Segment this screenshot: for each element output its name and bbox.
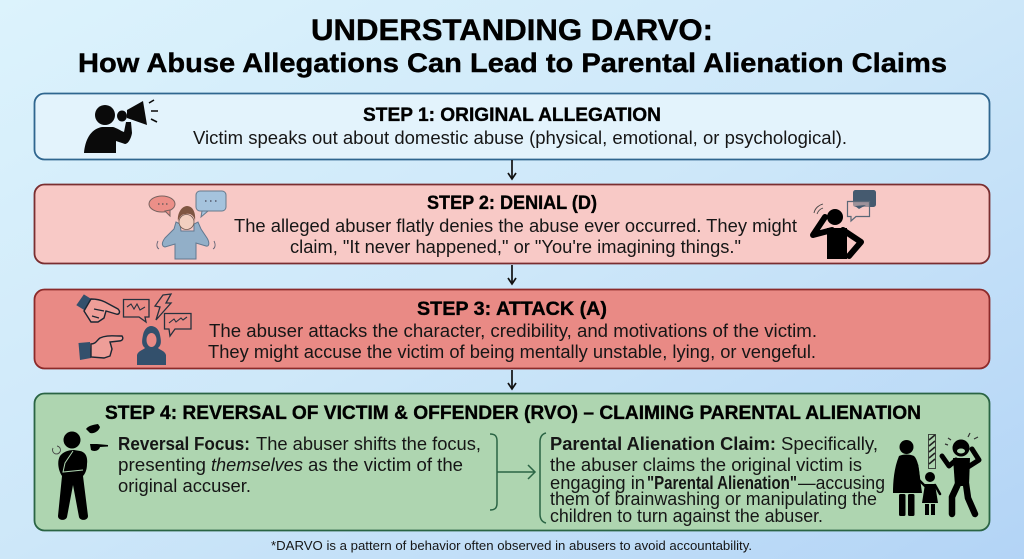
connector: bracket and arrow (490, 433, 546, 523)
parental alienation claim text: children to turn against the abuser. (550, 506, 823, 526)
step 4 heading: STEP 4: REVERSAL OF VICTIM & OFFENDER (RVO) – CLAIMING PARENTAL ALIENATION (105, 402, 921, 424)
reversal focus text: The abuser shifts the focus, (256, 433, 481, 454)
parental alienation claim text: Parental Alienation Claim: (550, 433, 776, 454)
icon: frustrated person with dark speech bubbles (813, 190, 876, 259)
title (78, 14, 947, 78)
panel: step 3 attack (34, 290, 990, 368)
step 3 text: They might accuse the victim of being mentally unstable, lying, or vengeful. (208, 341, 816, 362)
parental alienation claim text (550, 433, 885, 526)
icon: mother and child with distressed man (893, 433, 979, 516)
footnote: *DARVO is a pattern of behavior often observed in abusers to avoid accountability. (271, 538, 752, 553)
parental alienation claim text: Specifically, (781, 433, 878, 454)
parental alienation claim text: engaging in (550, 473, 645, 493)
icon: person with megaphone (84, 100, 158, 153)
step 1 heading: STEP 1: ORIGINAL ALLEGATION (363, 104, 661, 126)
icon: person covering ears with speech bubbles (149, 191, 226, 259)
reversal focus text: themselves (211, 454, 303, 475)
arrow: step 3 to 4 (511, 370, 513, 389)
title: UNDERSTANDING DARVO: (311, 14, 713, 47)
reversal focus text: Reversal Focus: (118, 433, 250, 454)
panel: step 1 original allegation (34, 94, 990, 160)
panel: step 2 denial (34, 184, 990, 264)
step 2 text: The alleged abuser flatly denies the abuse ever occurred. They might (234, 215, 797, 236)
reversal focus text: as the victim of the (308, 454, 463, 475)
arrow: step 2 to 3 (511, 265, 513, 284)
parental alienation claim text: the abuser claims the original victim is (550, 454, 862, 475)
step 3 text (208, 320, 817, 362)
reversal focus text: original accuser. (118, 475, 251, 496)
arrow: step 1 to 2 (511, 160, 513, 179)
step 2 text: claim, "It never happened," or "You're imagining things." (290, 236, 741, 257)
parental alienation claim text: —accusing (798, 473, 885, 493)
title: How Abuse Allegations Can Lead to Parental Alienation Claims (78, 48, 947, 78)
step 2 heading: STEP 2: DENIAL (D) (427, 192, 597, 214)
step 3 heading: STEP 3: ATTACK (A) (417, 298, 607, 320)
icon: person pointing at self with hands (52, 424, 108, 520)
icon: accusing hands, speech bubbles, lightning and woman (77, 294, 191, 365)
step 2 text (234, 215, 797, 257)
reversal focus text: presenting (118, 454, 206, 475)
reversal focus text (118, 433, 481, 496)
parental alienation claim text: "Parental Alienation" (647, 473, 797, 493)
step 3 text: The abuser attacks the character, credibility, and motivations of the victim. (209, 320, 817, 341)
panel: step 4 reversal (34, 394, 990, 530)
step 1 text: Victim speaks out about domestic abuse (physical, emotional, or psychological). (193, 127, 847, 148)
parental alienation claim text: them of brainwashing or manipulating the (550, 489, 877, 509)
